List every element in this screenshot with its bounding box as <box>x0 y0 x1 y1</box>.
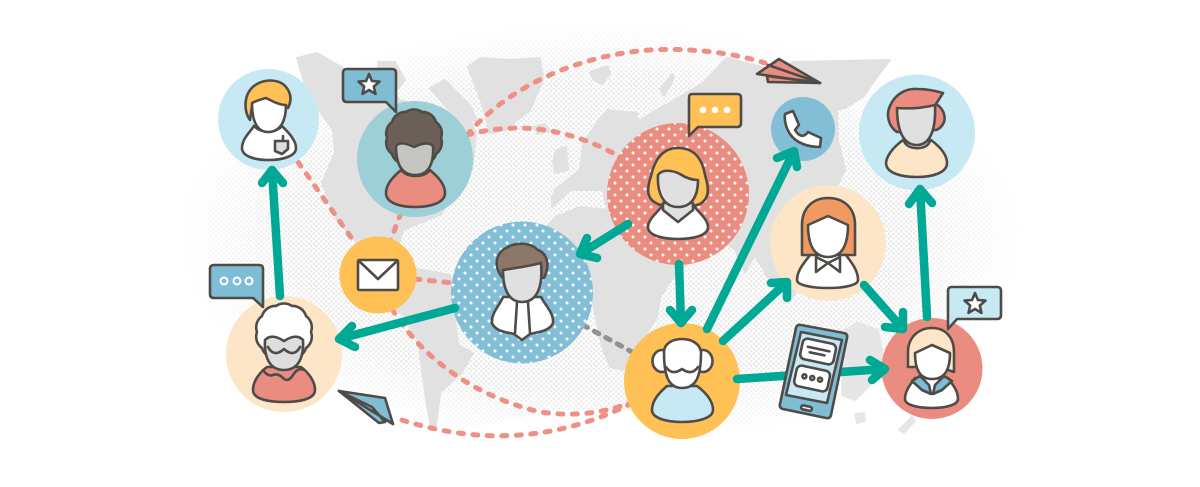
body <box>492 297 553 340</box>
panel: red dotted person <box>607 123 749 265</box>
dashed connection: lower upper arc <box>467 128 613 153</box>
South America <box>405 268 473 427</box>
speech bubble: star on light blue <box>948 287 1001 329</box>
Iceland and UK <box>533 124 568 173</box>
handset <box>785 111 821 147</box>
arrow: salmon person to top right person <box>909 189 932 317</box>
body <box>242 126 296 160</box>
hair <box>246 81 290 120</box>
glasses <box>268 347 300 353</box>
arrow: red person to grandfather <box>670 264 692 323</box>
speech bubble: dots on blue <box>210 265 263 307</box>
world map <box>297 53 915 433</box>
ellipsis dots <box>700 107 730 113</box>
hair <box>386 109 442 167</box>
Greenland <box>468 58 543 133</box>
face <box>808 216 848 257</box>
envelope <box>358 260 398 290</box>
Arctic islands <box>378 62 478 122</box>
arrow: red person to blue person <box>580 224 628 258</box>
icon: paper plane salmon <box>757 59 820 83</box>
hair <box>648 148 708 207</box>
arrow: grandfather to salmon person <box>737 360 885 380</box>
screen <box>786 332 842 403</box>
body <box>386 170 445 207</box>
hair tufts <box>652 350 672 372</box>
face <box>252 98 286 132</box>
dashed connection: envelope to blue circle <box>415 279 453 283</box>
body <box>797 255 858 288</box>
moustache <box>666 367 698 372</box>
hair <box>802 198 855 255</box>
halftone background <box>216 40 984 422</box>
hair <box>888 89 945 132</box>
star <box>964 293 986 313</box>
face <box>503 263 541 302</box>
body <box>905 378 958 408</box>
dashed connection: plane to grandfather <box>402 403 632 436</box>
speech bubble: star on blue <box>343 69 396 112</box>
panel: grandmother <box>226 296 342 412</box>
panel: grandfather <box>624 323 740 439</box>
face <box>664 339 701 388</box>
icon: tablet <box>780 325 847 418</box>
face <box>897 105 935 145</box>
icon: envelope circle <box>340 236 416 314</box>
arrow: grandmother to top left person <box>262 170 283 296</box>
home button <box>801 405 812 411</box>
Australia and islands <box>842 323 915 433</box>
body <box>886 140 947 177</box>
hair <box>908 328 954 372</box>
message bubble two <box>793 365 831 392</box>
hair <box>497 244 547 280</box>
collar <box>263 369 304 380</box>
panel: person top left <box>218 69 319 170</box>
face <box>915 345 950 379</box>
star <box>358 74 380 94</box>
dashed connection: afro person to envelope <box>390 213 401 242</box>
body <box>652 386 713 422</box>
dashed connection: grey link <box>583 325 632 352</box>
arrow: blue person to grandmother <box>339 308 455 347</box>
network illustration <box>208 40 1002 439</box>
ellipsis dots <box>220 278 252 284</box>
collar <box>912 376 952 394</box>
Eurasia and Africa <box>548 58 890 370</box>
face <box>265 337 303 370</box>
panel: peach person with bow tie <box>770 185 886 301</box>
body <box>648 205 708 239</box>
speech bubble: dots on orange <box>689 94 741 136</box>
arrow: grandfather to phone <box>707 151 797 329</box>
dashed connection: top left to envelope <box>298 162 355 243</box>
panel: blue dotted person <box>451 222 593 364</box>
message bubble one <box>799 338 837 365</box>
panel: afro person <box>357 101 473 217</box>
body <box>253 367 315 402</box>
neck <box>905 135 929 148</box>
face <box>396 143 433 175</box>
icon: paper plane blue <box>339 391 393 424</box>
arrow: grandfather to peach person <box>723 282 787 341</box>
arrow: peach person to salmon person <box>864 285 903 329</box>
hair <box>256 303 312 361</box>
Svalbard and Arctic Russia islands <box>590 66 674 96</box>
dashed connection: long upper arc <box>467 50 765 135</box>
dashed connection: envelope to grandfather <box>392 309 632 414</box>
North America <box>297 53 476 332</box>
tie <box>515 302 530 333</box>
panel: salmon person <box>882 318 982 419</box>
panel: top right person <box>859 74 975 190</box>
face <box>658 171 698 207</box>
pocket with pen <box>275 136 288 154</box>
icon: phone circle <box>771 97 835 161</box>
bow tie <box>816 257 840 272</box>
collar <box>663 203 693 222</box>
